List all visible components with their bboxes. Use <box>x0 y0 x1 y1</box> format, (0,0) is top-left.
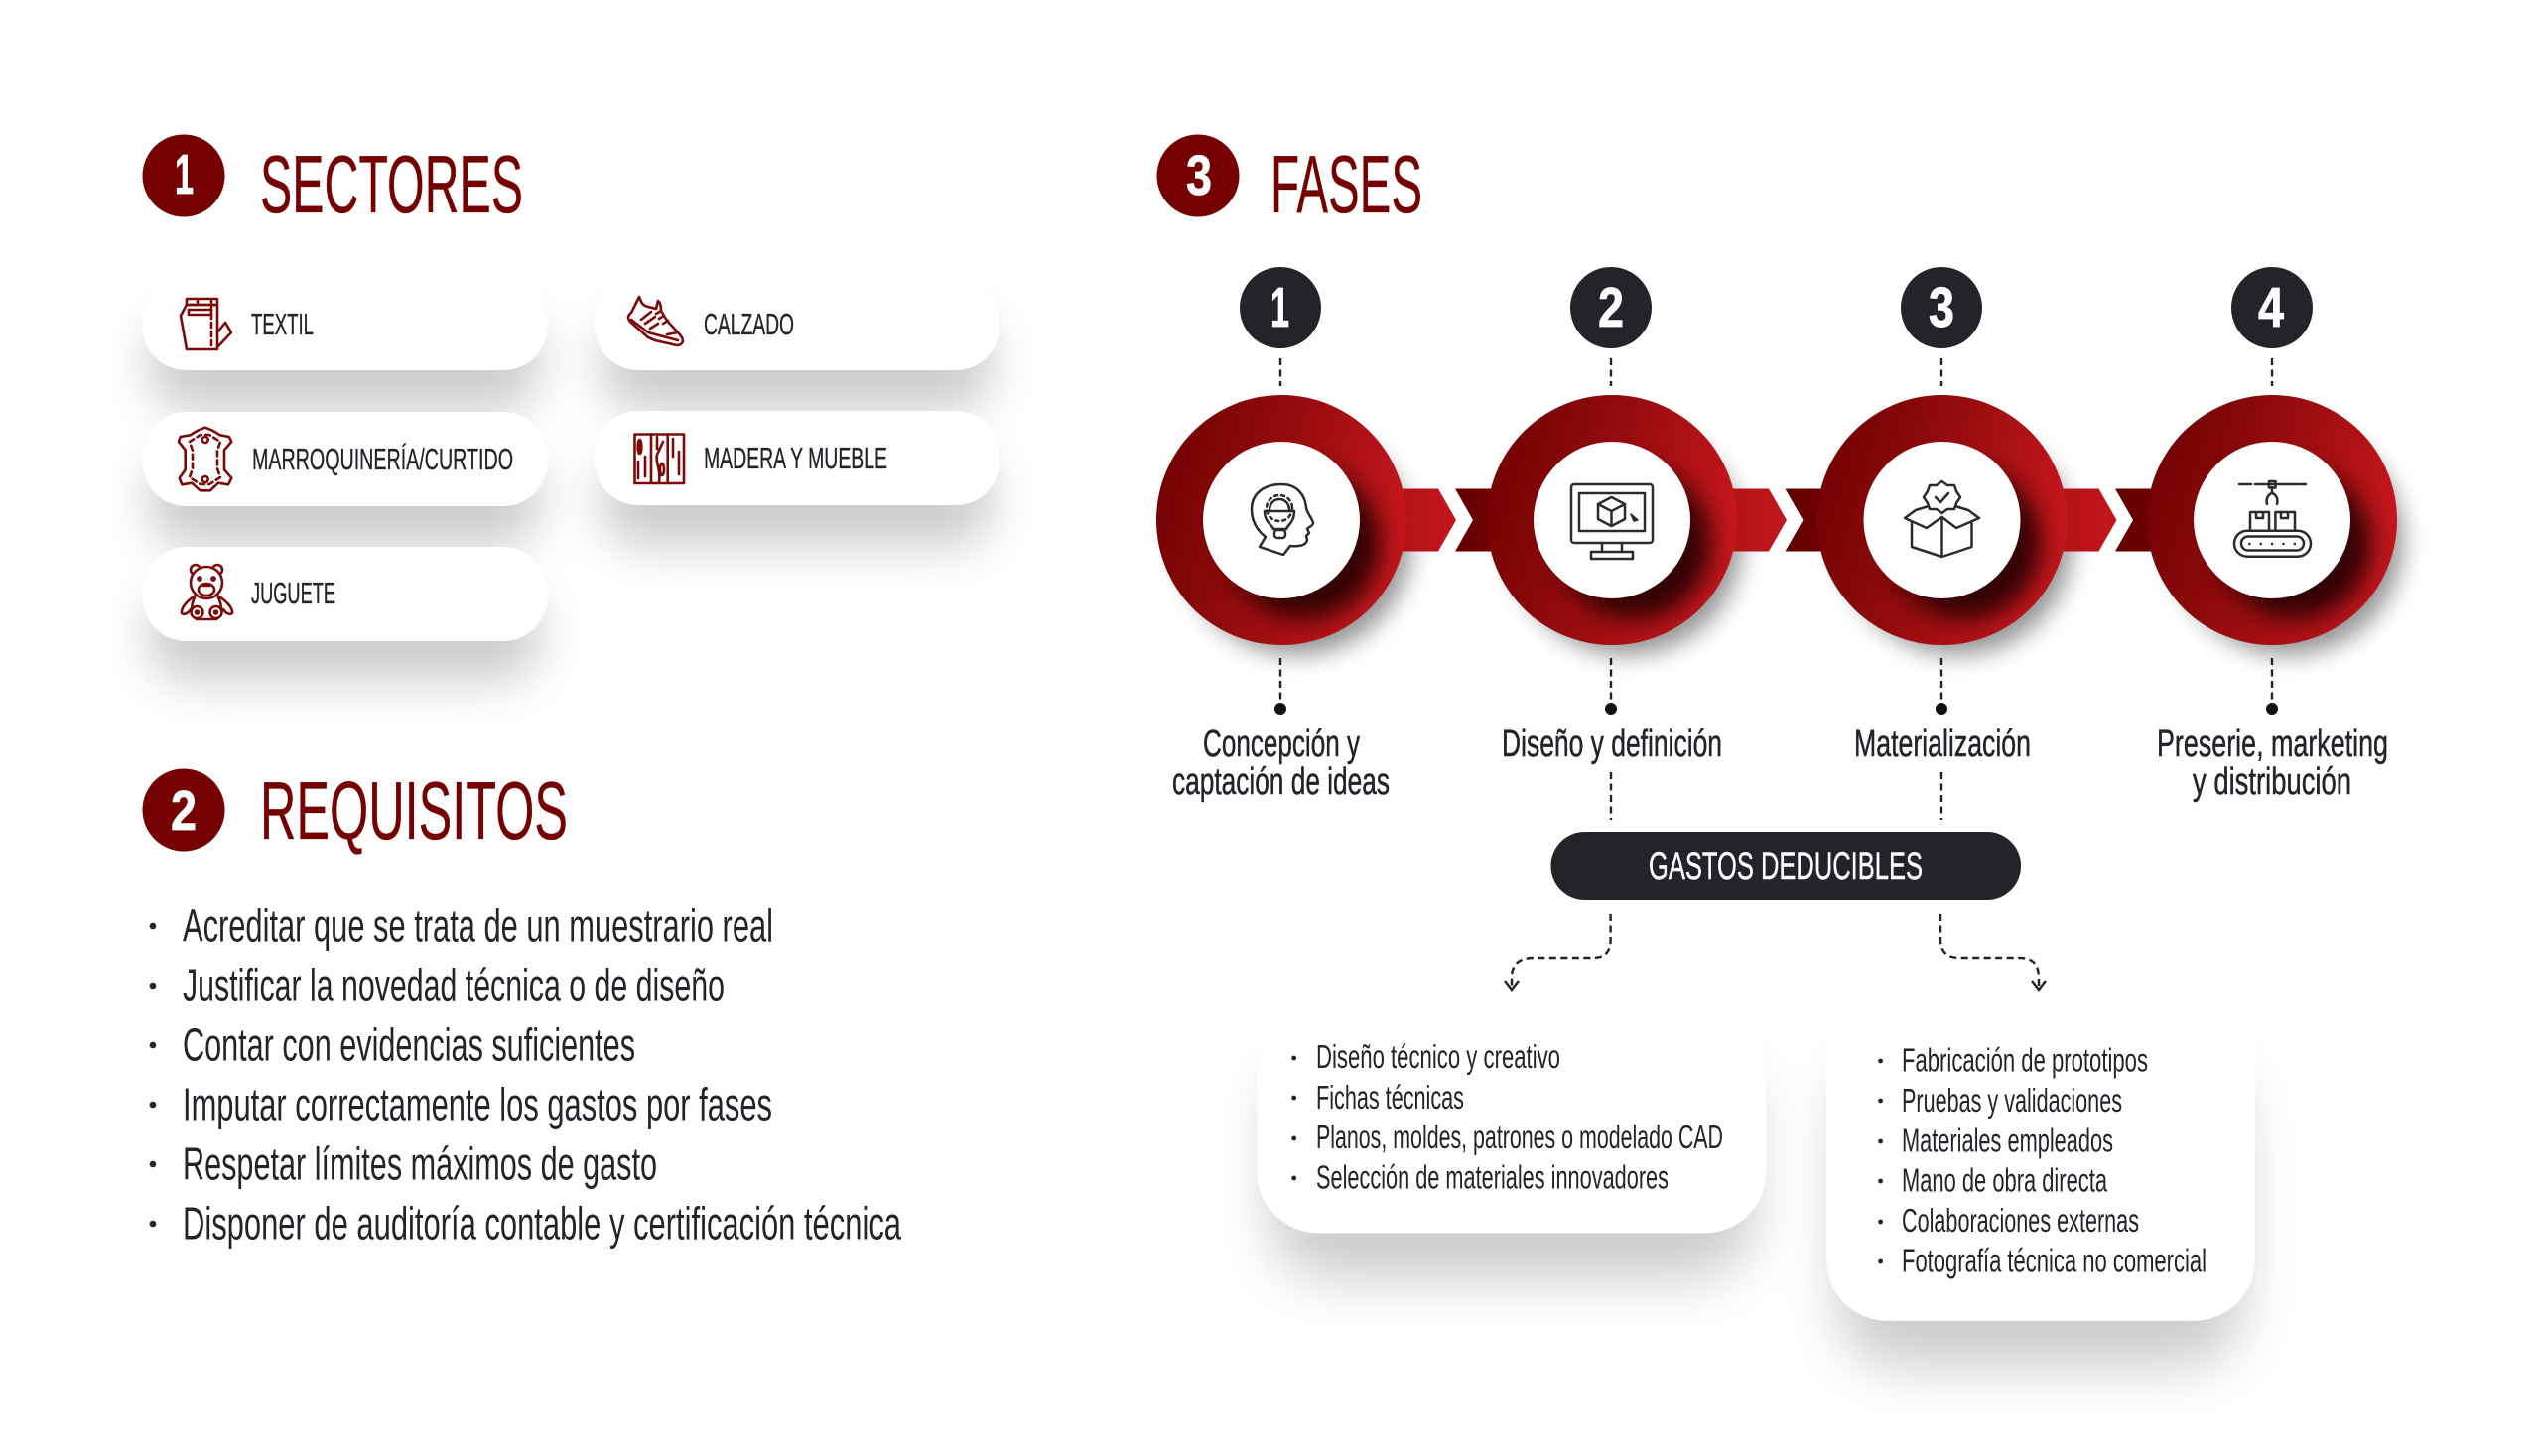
requirements list: Disponer de auditoría contable y certificación técnica <box>183 1197 901 1249</box>
panel: materialization costs: Pruebas y validaciones <box>1902 1082 2122 1119</box>
icon: leather hide <box>179 428 231 490</box>
requirements list: Imputar correctamente los gastos por fases <box>183 1078 772 1129</box>
ring step 4 <box>2115 395 2397 645</box>
label: phase 4 <box>2157 724 2388 803</box>
pill: juguete <box>143 547 548 641</box>
icon: garment and fabric swatch <box>181 299 231 349</box>
pill: madera <box>595 411 1000 505</box>
heading: FASES: FASES <box>1270 138 1422 230</box>
cost box shadows <box>1270 1060 2242 1366</box>
label: phase 4: y distribución <box>2193 761 2351 803</box>
icon: wood planks <box>635 435 684 483</box>
pill: textil <box>143 276 548 370</box>
panel: materialization costs: Materiales empleados <box>1902 1122 2113 1159</box>
heading badge 1: 1 <box>175 143 194 206</box>
requirements list: Respetar límites máximos de gasto <box>183 1137 657 1189</box>
heading badge 3: 3 <box>1186 144 1212 207</box>
panel: design costs: Fichas técnicas <box>1316 1079 1464 1116</box>
heading badge 2 <box>143 768 224 852</box>
section: fases <box>1156 135 2403 1366</box>
heading: SECTORES: SECTORES <box>260 138 523 230</box>
icon: head with bulb and gear <box>1252 484 1313 555</box>
panel: materialization costs <box>1826 1001 2255 1321</box>
label: CALZADO <box>704 308 794 341</box>
pill: marroquineria <box>143 412 548 506</box>
panel: design costs: Selección de materiales innovadores <box>1316 1159 1669 1195</box>
icon: sneaker <box>628 297 683 345</box>
label: phase 4: Preserie, marketing <box>2157 724 2388 765</box>
step number 3: 3 <box>1929 276 1954 339</box>
label: phase 1: captación de ideas <box>1172 761 1390 803</box>
ring step 1 <box>1156 395 1456 645</box>
label: MADERA Y MUEBLE <box>704 442 887 475</box>
step number 1: 1 <box>1270 276 1289 339</box>
requirements list <box>150 899 901 1249</box>
label dots <box>1274 703 2278 715</box>
heading badge 1 <box>143 135 224 216</box>
step number 1 <box>1240 267 1321 348</box>
panel: design costs: Planos, moldes, patrones o modelado CAD <box>1316 1119 1723 1155</box>
label: phase 1: Concepción y <box>1203 724 1360 765</box>
ring shadows <box>1181 425 2403 655</box>
dashed connectors from numbers to rings and labels <box>1280 358 2272 820</box>
panel: materialization costs: Mano de obra directa <box>1902 1161 2107 1199</box>
panel: design costs: Diseño técnico y creativo <box>1316 1038 1560 1075</box>
panel: design costs <box>1257 1003 1767 1233</box>
label: phase 1 <box>1172 724 1390 803</box>
requirements list: Acreditar que se trata de un muestrario real <box>183 899 773 951</box>
step number 3 <box>1901 267 1982 348</box>
arrow: to design costs <box>1505 914 1611 990</box>
step number 4 <box>2231 267 2313 348</box>
ring step 2 <box>1455 395 1787 645</box>
requirements list: Justificar la novedad técnica o de diseño <box>183 959 725 1010</box>
panel: materialization costs: Fotografía técnica no comercial <box>1902 1243 2207 1278</box>
label: phase 2: Diseño y definición <box>1502 724 1722 765</box>
step number 2 <box>1570 267 1652 348</box>
section: sectores <box>143 135 1000 681</box>
icon: open box with check badge <box>1905 481 1979 557</box>
label: JUGUETE <box>251 577 335 610</box>
arrow: to materialization costs <box>1940 914 2046 990</box>
section: requisitos <box>143 764 901 1249</box>
label: MARROQUINERÍA/CURTIDO <box>252 442 513 476</box>
heading badge 3 <box>1157 135 1239 216</box>
label: phase 3: Materialización <box>1854 724 2031 765</box>
heading badge 2: 2 <box>171 779 197 843</box>
panel: materialization costs: Fabricación de prototipos <box>1902 1042 2148 1078</box>
pill: calzado <box>595 276 1000 370</box>
ring step 3 <box>1785 395 2116 645</box>
icon: conveyor belt with robotic arm <box>2234 481 2311 557</box>
panel: materialization costs: Colaboraciones externas <box>1902 1202 2139 1239</box>
icon: teddy bear <box>182 565 232 619</box>
pill: gastos deducibles <box>1550 832 2021 900</box>
label: TEXTIL <box>251 308 314 341</box>
icon: monitor with 3D cube <box>1571 484 1653 559</box>
step number 2: 2 <box>1598 276 1624 339</box>
step number 4: 4 <box>2258 276 2284 339</box>
pill: gastos deducibles: GASTOS DEDUCIBLES <box>1649 845 1923 888</box>
heading: REQUISITOS: REQUISITOS <box>260 764 568 857</box>
requirements list: Contar con evidencias suficientes <box>183 1018 635 1070</box>
pill shadows <box>149 316 993 681</box>
